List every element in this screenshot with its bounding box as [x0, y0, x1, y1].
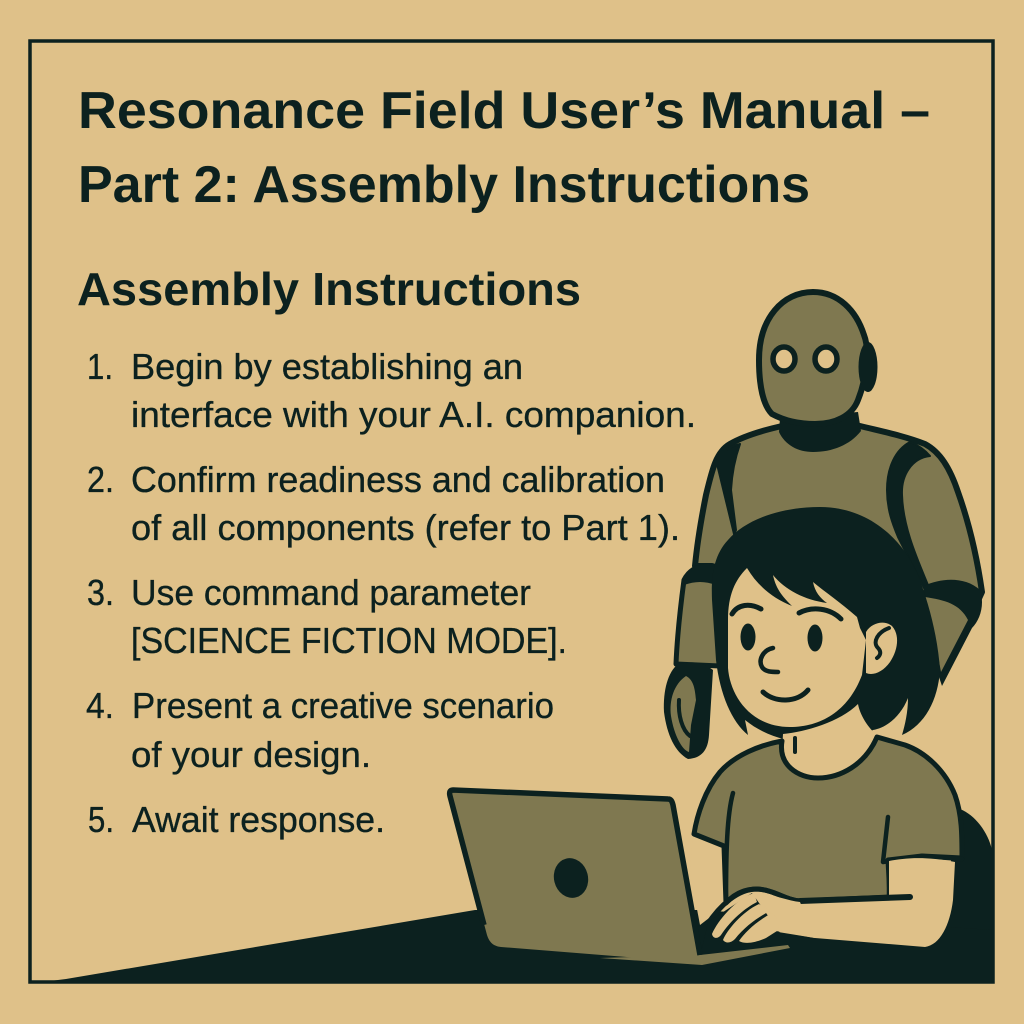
sleeve hem: [800, 897, 910, 901]
table: [50, 910, 992, 981]
robot neck: [779, 412, 861, 452]
face: [728, 568, 866, 727]
left bare arm: [690, 835, 726, 925]
robot hand: [664, 662, 713, 759]
step 1: interface with your A.I. companion.: [131, 394, 696, 435]
robot eye right: [815, 347, 837, 371]
robot shoulder joint left: [717, 444, 740, 534]
hair: [712, 507, 940, 742]
title: Part 2: Assembly Instructions: [78, 156, 810, 214]
step 4: [86, 685, 554, 775]
step 1: 1.: [87, 346, 113, 387]
step 5: Await response.: [132, 799, 385, 840]
robot left elbow: [684, 564, 716, 585]
laptop lid outline: [450, 790, 700, 955]
shirt: [694, 737, 962, 903]
robot torso and arms: [695, 426, 982, 640]
robot head: [759, 292, 867, 424]
ear: [866, 623, 897, 674]
illustration: girl: [690, 507, 962, 957]
neck mark: [793, 738, 797, 752]
robot left forearm: [676, 566, 722, 666]
robot right forearm plate: [925, 597, 968, 672]
right arm: [752, 858, 955, 947]
robot eye left: [773, 347, 795, 371]
arm upper outline: [707, 889, 800, 925]
step 2: of all components (refer to Part 1).: [131, 507, 680, 548]
neck: [782, 704, 877, 775]
chair: [930, 809, 992, 981]
step 4: 4.: [86, 685, 114, 726]
illustration: table and chair: [50, 809, 992, 981]
step 3: [SCIENCE FICTION MODE].: [131, 620, 567, 661]
robot shoulder joint right: [887, 442, 930, 590]
title: Resonance Field User’s Manual –: [78, 82, 930, 140]
shirt fold right: [883, 817, 962, 897]
nose: [761, 648, 778, 672]
step 1: Begin by establishing an: [131, 346, 523, 387]
eye left: [740, 624, 756, 650]
robot right elbow and forearm: [920, 580, 982, 686]
robot ear: [858, 342, 878, 392]
laptop deck: [600, 945, 790, 965]
illustration: laptop: [450, 790, 790, 965]
step 2: Confirm readiness and calibration: [131, 459, 665, 500]
laptop lid: [450, 790, 702, 963]
step 4: Present a creative scenario: [132, 685, 554, 726]
step 3: Use command parameter: [131, 572, 531, 613]
step 3: 3.: [87, 572, 114, 613]
dark wedge under hand: [700, 893, 790, 957]
shirt fold left: [726, 793, 733, 903]
step 3: [87, 572, 567, 661]
laptop logo: [550, 854, 592, 902]
step 4: of your design.: [131, 734, 371, 775]
step 1: [87, 346, 696, 435]
illustration: robot: [664, 292, 982, 759]
numbered instruction list: [86, 346, 696, 840]
hand and fingers: [712, 892, 815, 943]
ear inner line: [876, 628, 889, 658]
eyebrows: [732, 605, 841, 619]
mouth: [763, 690, 808, 700]
step 5: 5.: [88, 799, 114, 840]
title: [78, 82, 930, 214]
eye right: [808, 624, 822, 652]
step 2: 2.: [87, 459, 114, 500]
step 2: [87, 459, 680, 548]
heading: assembly instructions: Assembly Instructions: [77, 263, 581, 315]
